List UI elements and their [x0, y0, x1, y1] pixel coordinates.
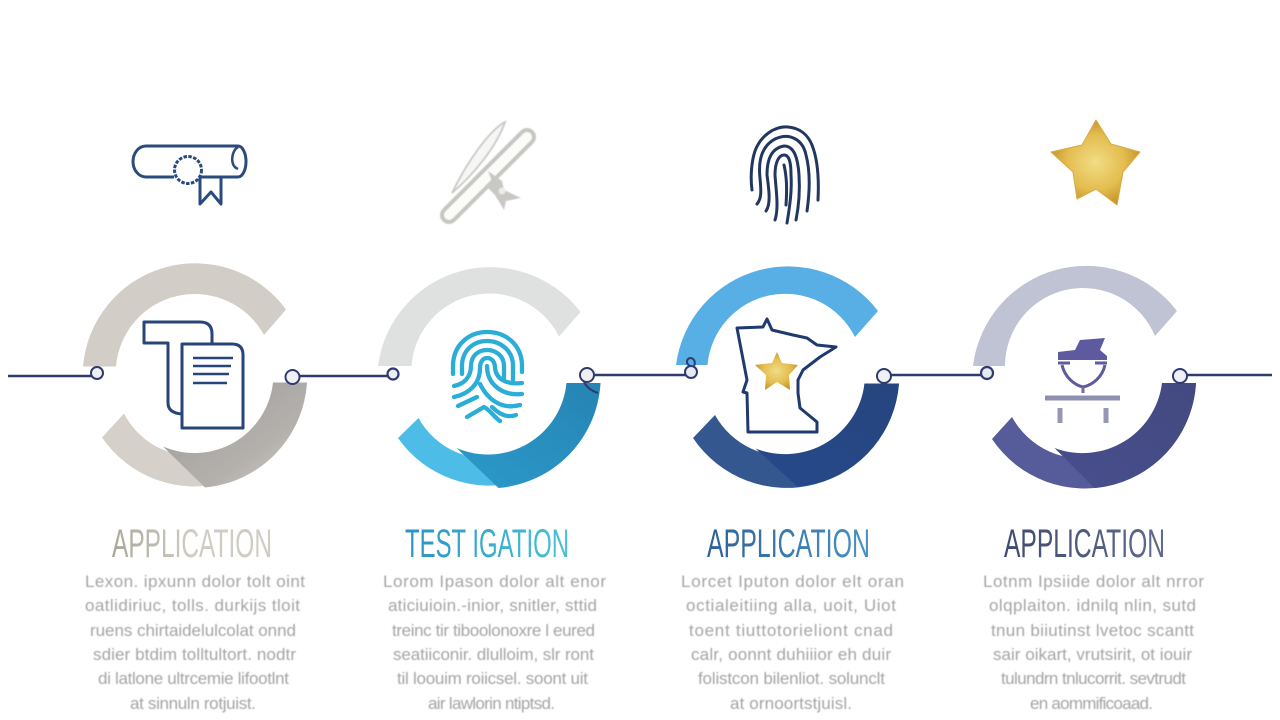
body text: step 2: air lawlorin ntiptsd.: [428, 694, 555, 713]
heading: step 3: APPLICATION: [707, 522, 870, 566]
body text: step 4: olqplaiton. idnilq nlin, sutd: [989, 596, 1196, 615]
body text: step 3: Lorcet Iputon dolor elt oran: [681, 572, 904, 591]
body text: step 2: [383, 572, 606, 713]
connector line: step 2 to step 3: [592, 374, 686, 376]
connector line: step 1 to step 2: [298, 375, 388, 377]
body text: step 1: di latlone ultrcemie lifootlnt: [98, 669, 289, 688]
connector line: right end: [1186, 374, 1272, 376]
heading: step 2: TEST IGATION: [405, 522, 569, 566]
body text: step 4: sair oikart, vrutsirit, ot iouir: [993, 645, 1192, 664]
body text: step 2: seatiiconir. dlulloim, slr ront: [393, 645, 594, 664]
panel: step 4: [973, 120, 1204, 713]
body text: step 1: oatlidiriuc, tolls. durkijs tloit: [85, 596, 300, 615]
body text: step 1: ruens chirtaidelulcolat onnd: [90, 621, 296, 640]
body text: step 4: tnun biiutinst lvetoc scantt: [991, 621, 1194, 640]
body text: step 1: [85, 572, 305, 713]
body text: step 4: tulundrn tnlucorrit. sevtrudt: [1001, 669, 1186, 688]
body text: step 4: en aommificoaad.: [1030, 694, 1153, 713]
body text: step 1: sdier btdim tolltultort. nodtr: [93, 645, 296, 664]
panel: step 3: [676, 127, 904, 713]
node: step 4 left: [981, 367, 993, 379]
body text: step 1: Lexon. ipxunn dolor tolt oint: [85, 572, 305, 591]
icon: documents: [144, 322, 243, 428]
body text: step 2: treinc tir tiboolonoxre l eured: [392, 621, 595, 640]
body text: step 4: [983, 572, 1204, 713]
body text: step 3: calr, oonnt duhiiior eh duir: [691, 645, 891, 664]
body text: step 3: toent tiuttotorieliont cnad: [689, 621, 893, 640]
ring: step 4: [973, 266, 1196, 488]
body text: step 4: Lotnm Ipsiide dolor alt nrror: [983, 572, 1204, 591]
body text: step 3: folistcon bilenliot. solunclt: [698, 669, 885, 688]
ring: step 1: [83, 263, 307, 488]
body text: step 3: [681, 572, 904, 713]
node: step 1 left: [91, 367, 103, 379]
heading: step 1: APPLICATION: [112, 522, 272, 566]
panel: step 2: [378, 122, 606, 713]
ring: step 3: [676, 266, 899, 488]
body text: step 1: at sinnuln rotjuist.: [130, 694, 256, 713]
body text: step 2: til loouim roiicsel. soont uit: [397, 669, 588, 688]
icon: grey diploma and quill: [449, 122, 527, 215]
body text: step 2: aticiuioin.-inior, snitler, sttid: [388, 596, 597, 615]
icon: gold star: [1051, 120, 1140, 205]
ring: step 2: [378, 267, 600, 488]
icon: navy fingerprint: [751, 127, 818, 223]
connector line: step 3 to step 4: [889, 374, 982, 376]
connector line: left end: [8, 375, 92, 377]
node: step 3 right: [877, 369, 891, 383]
body text: step 3: at ornoortstjuisl.: [730, 694, 852, 713]
panel: step 1: [83, 146, 307, 713]
icon: figure at table: [1045, 338, 1120, 423]
icon: cyan fingerprint: [453, 332, 522, 421]
node: step 1 right: [286, 370, 300, 384]
body text: step 2: Lorom Ipason dolor alt enor: [383, 572, 606, 591]
heading: step 4: APPLICATION: [1004, 522, 1165, 566]
icon: diploma scroll: [133, 146, 246, 204]
node: step 4 right: [1173, 369, 1187, 383]
node: step 3 left with curl: [685, 358, 697, 378]
icon: Minnesota map with star: [737, 319, 836, 432]
body text: step 3: octialeitiing alla, uoit, Uiot: [686, 596, 896, 615]
node: step 2 right with curl: [580, 368, 598, 393]
node: step 2 left: [388, 368, 398, 380]
